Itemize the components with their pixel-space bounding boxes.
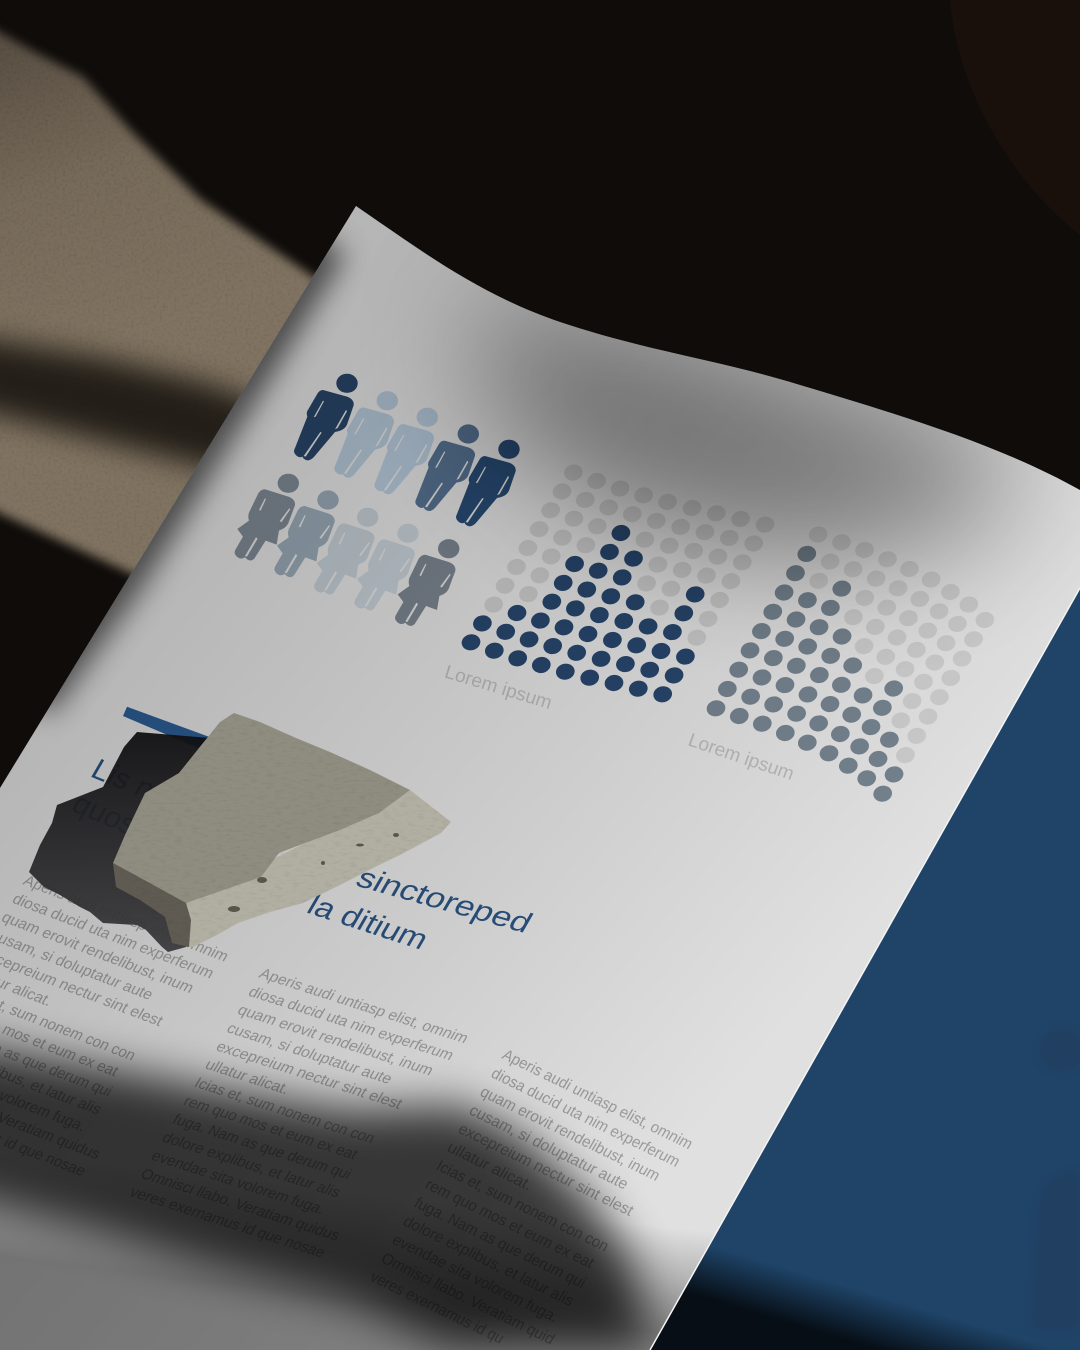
heading — [66, 753, 538, 956]
thin bright page edge against the blue panel — [650, 588, 1080, 1350]
stone cast shadow — [29, 732, 222, 952]
text column 2: rem quo mos et eum ex eat — [180, 1093, 361, 1163]
text column 1: quam erovit rendelibust, inum — [0, 909, 197, 997]
text column 1 — [0, 873, 231, 1185]
text column 2: excepreium nectur sint elest — [213, 1039, 406, 1113]
stone — [113, 713, 451, 947]
text column 2: Aperis audi untiasp elist, omnim — [256, 966, 471, 1047]
text column 3 — [367, 1047, 696, 1350]
text column 3: cusam, si doluptatur aute — [466, 1102, 631, 1193]
row of men — [294, 374, 520, 526]
text column 2: Omnisci llabo. Veratiam quidus — [137, 1166, 343, 1244]
text column 3: evendae sita volorem fuga. — [389, 1232, 561, 1326]
text column 3: Aperis audi untiasp elist, omnim — [499, 1047, 696, 1153]
stone top face — [113, 713, 410, 903]
text column 3: ullatur alicat. — [444, 1139, 535, 1194]
heading: quos — [66, 787, 143, 841]
text column 2: ullatur alicat. — [202, 1057, 293, 1098]
stone grain — [113, 713, 451, 947]
text column 3: Icias et, sum nonem con con — [433, 1158, 612, 1255]
stone dark broken edge — [113, 863, 191, 947]
text column 2: fuga. Nam as que derum qui — [170, 1111, 354, 1183]
text column 2: evendae sita volorem fuga. — [148, 1148, 328, 1218]
dot matrix chart 1 — [460, 463, 776, 704]
dot matrix chart 2 — [705, 525, 996, 803]
text column 2: diosa ducid uta nim experferum — [245, 984, 457, 1064]
text column 3: fuga. Nam as que derum qui — [411, 1195, 589, 1292]
chart 2 caption: Lorem ipsum — [685, 730, 797, 785]
text column 3: veres exernamus id qu — [367, 1269, 507, 1347]
text column 3: Omnisci llabo. Veratiam quid — [378, 1250, 557, 1348]
text column 3: excepreium nectur sint elest — [455, 1121, 637, 1220]
text column 2: cusam, si doluptatur aute — [224, 1020, 395, 1087]
blue accent bar — [123, 707, 213, 748]
heading: sinctoreped — [350, 862, 538, 939]
text column 1: Aperis audi untiasp elist, omnim — [20, 873, 231, 965]
row of women — [235, 474, 459, 626]
text column 2: Icias et, sum nonem con con — [191, 1075, 378, 1147]
people pictogram — [235, 374, 520, 626]
text column 1: diosa ducid uta nim experferum — [9, 891, 217, 982]
sunlit concrete patch — [0, 10, 340, 605]
text column 3: rem quo mos et eum ex eat — [422, 1176, 598, 1272]
text column 2: veres exernamus id que nosae — [126, 1184, 328, 1261]
text column 2: quam erovit rendelibust, inum — [234, 1002, 436, 1079]
blue cover panel — [640, 580, 1080, 1350]
faint silhouettes on the blue — [1030, 1028, 1080, 1330]
stone pits — [228, 833, 399, 912]
text column 2 — [126, 966, 471, 1265]
text column 3: dolore explibus, et latur alis — [400, 1213, 577, 1310]
chart 1 caption: Lorem ipsum — [442, 662, 554, 714]
text column 2: dolore explibus, et latur alis — [159, 1130, 344, 1201]
text column 3: diosa ducid uta nim experferum — [488, 1065, 683, 1171]
dark bowl, top right — [950, 0, 1080, 235]
heading: Lis n — [85, 753, 161, 806]
text column 3: quam erovit rendelibust, inum — [477, 1084, 663, 1185]
heading: la ditium — [301, 889, 434, 956]
stone light side — [186, 790, 451, 947]
